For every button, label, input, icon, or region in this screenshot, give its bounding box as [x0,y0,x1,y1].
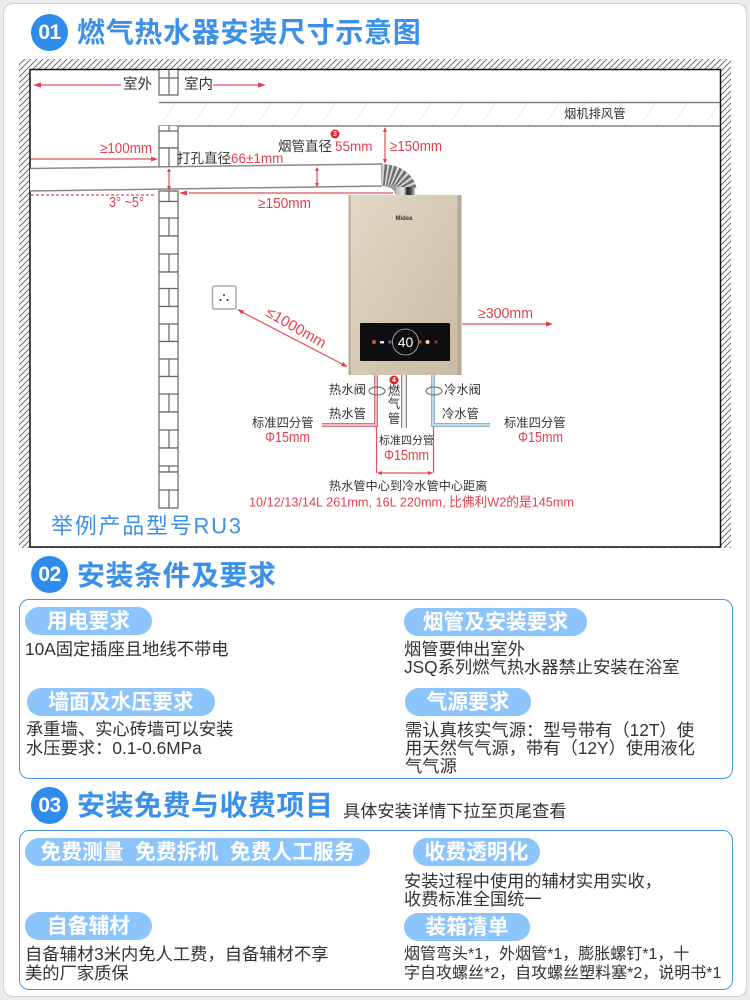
pill: electrical: 用电要求 [47,610,130,633]
side clearance 150mm label: ≥150mm [258,196,311,212]
corrugated flue elbow [382,175,415,196]
example model label: 举例产品型号RU3 [51,514,241,538]
pill: flue [404,608,587,636]
section 02 number badge: 02 [38,563,61,586]
pill: wall and water pressure [27,688,215,716]
exhaust duct [159,102,720,126]
transparent fees text: 收费标准全国统一 [404,889,542,909]
pill: gas source [405,688,531,716]
pipe centre distance note: 热水管中心到冷水管中心距离 [329,478,487,493]
gas pipe vertical label [388,383,401,426]
section 01 number badge: 01 [38,21,61,44]
pill: gas source: 气源要求 [426,691,510,714]
wall and water pressure text [26,719,233,758]
gas source text: 用天然气气源，带有（12Y）使用液化 [405,738,695,758]
hot water valve label: 热水阀 [329,383,366,397]
transparent fees text [404,871,662,909]
brick wall [159,70,178,508]
panel: installation requirements [19,599,733,779]
centre pipe spec [379,433,434,464]
red dimension arrows [31,82,553,475]
transparent fees text: 安装过程中使用的辅材实用实收， [404,871,662,891]
section 01 number badge [31,14,68,51]
top clearance 150mm label: ≥150mm [390,139,442,155]
gas pipe vertical label: 燃 [388,383,401,398]
pipe centre distance note [249,478,574,510]
right pipe spec: Φ15mm [518,430,563,446]
pipe centre distance note: 10/12/13/14L 261mm, 16L 220mm, 比佛利W2的是145mm [249,494,574,510]
hot water pipe label: 热水管 [329,406,366,421]
pill: flue: 烟管及安装要求 [423,611,568,634]
packing list text: 字自攻螺丝*2，自攻螺丝塑料塞*2，说明书*1 [404,965,721,982]
left pipe spec: 标准四分管 [252,415,314,430]
wall socket icon [212,286,236,309]
centre pipe spec: Φ15mm [384,448,429,464]
installation dimension diagram [19,59,731,548]
pill: packing list: 装箱清单 [425,916,509,939]
cold water valve label: 冷水阀 [444,383,481,397]
section 03 number badge [31,787,68,824]
hole diameter label: 打孔直径66±1mm [177,150,283,166]
packing list text: 烟管弯头*1，外烟管*1，膨胀螺钉*1，十 [404,946,689,963]
wall and water pressure text: 承重墙、实心砖墙可以安装 [26,719,233,739]
pill: wall and water pressure: 墙面及水压要求 [48,691,194,714]
section 03 side note: 具体安装详情下拉至页尾查看 [343,801,566,821]
hatched wall border and frame [19,59,731,548]
section 02 heading: 安装条件及要求 [77,560,277,591]
slope angle label: 3° ~5° [109,195,144,211]
gas source text [405,720,695,776]
gas source text: 气气源 [405,756,457,776]
gas pipe vertical label: 管 [388,411,400,426]
left pipe spec [252,415,314,446]
flue text: 烟管要伸出室外 [404,639,525,659]
exhaust duct label: 烟机排风管 [564,106,626,121]
pill: free services: 免费测量 免费拆机 免费人工服务 [40,841,355,864]
left pipe spec: Φ15mm [265,430,310,446]
own materials text [25,944,328,983]
section 02 number badge [31,556,68,593]
water heater: Midea [395,216,413,222]
pill: own materials [25,912,152,940]
wall and water pressure text: 水压要求：0.1-0.6MPa [26,738,202,758]
pill: electrical [25,607,152,635]
panel: free and charged items [19,830,733,990]
pill: packing list [404,913,530,941]
water heater [348,195,462,375]
electrical text: 10A固定插座且地线不带电 [25,639,229,659]
outdoor label: 室外 [123,76,152,93]
cold water pipe label: 冷水管 [442,406,479,421]
gas pipe vertical label: 气 [388,396,400,411]
right pipe spec: 标准四分管 [504,415,566,430]
packing list text [404,945,721,982]
flue text: JSQ系列燃气热水器禁止安装在浴室 [404,657,680,677]
gas source text: 需认真核实气源：型号带有（12T）使 [405,720,694,740]
right pipe spec [504,415,566,446]
pill: own materials: 自备辅材 [47,915,130,938]
indoor label: 室内 [184,76,213,93]
pipes under the heater [322,375,490,428]
water heater: 40 [398,334,413,350]
number marker 3 [330,130,340,138]
clearance 300mm label: ≥300mm [478,306,533,322]
pill: transparent fees: 收费透明化 [424,841,528,864]
number marker 4 [390,376,398,384]
pill: transparent fees [413,838,540,866]
section 01 heading: 燃气热水器安装尺寸示意图 [77,17,421,48]
flue diameter label: 烟管直径55mm [278,138,373,154]
section 03 number badge: 03 [38,794,61,817]
socket distance label: ≤1000mm [263,304,329,352]
flue pipe [30,164,382,191]
section 03 heading: 安装免费与收费项目 [77,790,334,821]
own materials text: 美的厂家质保 [25,963,129,983]
own materials text: 自备辅材3米内免人工费，自备辅材不享 [25,944,328,964]
number marker 3: 3 [333,131,337,138]
flue text [404,639,680,677]
clearance 100mm label: ≥100mm [100,141,152,157]
centre pipe spec: 标准四分管 [379,433,434,447]
number marker 4: 4 [392,377,396,384]
